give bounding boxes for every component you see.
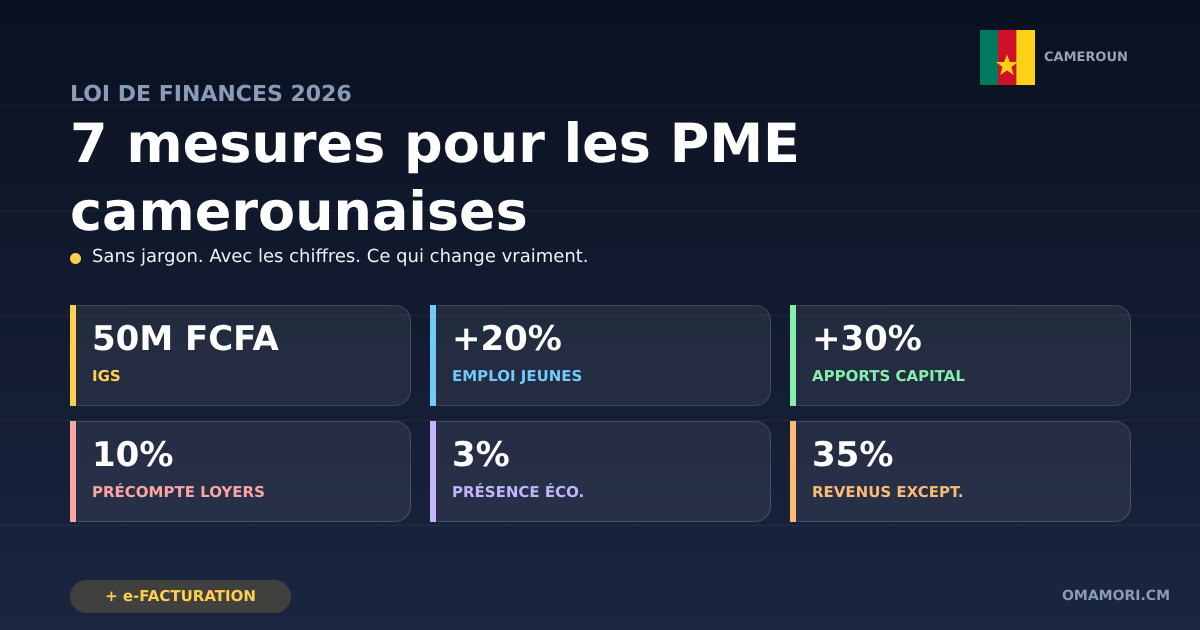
- card: +20% emploi jeunes: +20%: [452, 319, 562, 359]
- card: 50M FCFA IGS: 50M FCFA: [92, 319, 279, 359]
- card: 3% présence éco: PRÉSENCE ÉCO.: [452, 483, 584, 501]
- badge: e-facturation: + e-FACTURATION: [105, 587, 256, 605]
- card: +20% emploi jeunes: EMPLOI JEUNES: [452, 367, 582, 385]
- card: 35% revenus except: 35%: [812, 435, 893, 475]
- card: +20% emploi jeunes: [430, 305, 771, 406]
- kicker: LOI DE FINANCES 2026: [70, 82, 352, 107]
- card: 35% revenus except: [790, 421, 1131, 522]
- subtitle text: Sans jargon. Avec les chiffres. Ce qui change vraiment.: [92, 246, 589, 267]
- title: camerounaises: [70, 180, 528, 243]
- card: 3% présence éco: [430, 421, 771, 522]
- card: +30% apports capital: APPORTS CAPITAL: [812, 367, 965, 385]
- card: +30% apports capital: [790, 305, 1131, 406]
- card: 10% précompte loyers: 10%: [92, 435, 173, 475]
- subtitle with bullet: [70, 246, 589, 267]
- footer brand: OMAMORI.CM: [1062, 588, 1170, 604]
- card: 35% revenus except: REVENUS EXCEPT.: [812, 483, 964, 501]
- card: 50M FCFA IGS: IGS: [92, 367, 121, 385]
- card: 3% présence éco: 3%: [452, 435, 510, 475]
- country label: CAMEROUN: [1044, 50, 1128, 65]
- title: [70, 112, 800, 243]
- bullet dot: [70, 253, 81, 264]
- badge: e-facturation: [70, 580, 291, 613]
- card: 10% précompte loyers: PRÉCOMPTE LOYERS: [92, 483, 265, 501]
- card: +30% apports capital: +30%: [812, 319, 922, 359]
- card: 10% précompte loyers: [70, 421, 411, 522]
- title: 7 mesures pour les PME: [70, 112, 800, 175]
- icon: Cameroon flag: [980, 30, 1035, 85]
- card: 50M FCFA IGS: [70, 305, 411, 406]
